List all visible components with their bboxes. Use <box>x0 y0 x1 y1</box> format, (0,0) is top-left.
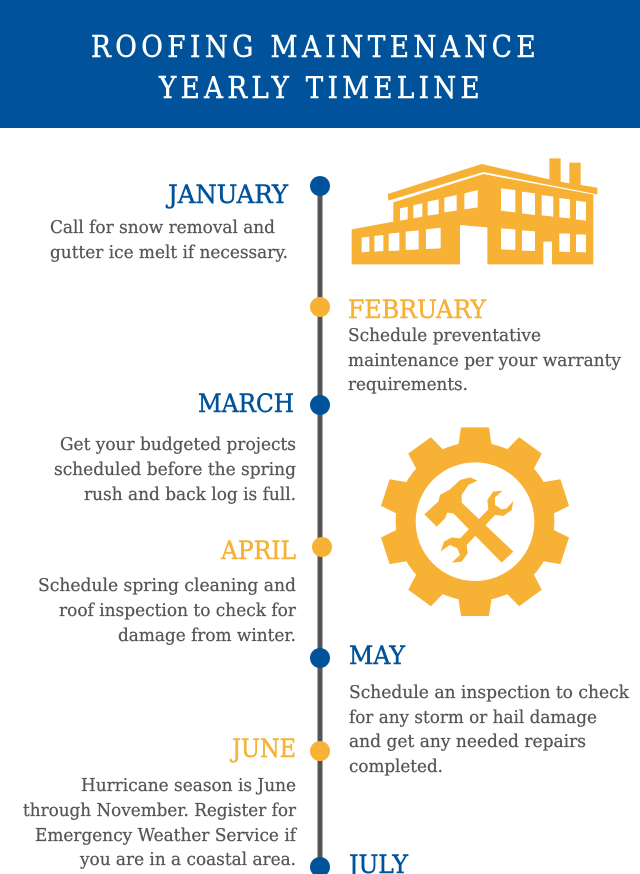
entry: May: MAY <box>349 641 405 670</box>
icon: building <box>352 158 597 264</box>
entry: April: roof inspection to check for <box>59 600 296 621</box>
entry: April: damage from winter. <box>118 625 296 646</box>
entry: March <box>54 389 296 505</box>
entry: May: completed. <box>349 756 443 777</box>
icon: gear with hammer and wrench <box>380 427 570 616</box>
entry: February <box>348 295 622 395</box>
entry: June: through November. Register for <box>23 800 296 821</box>
timeline line <box>318 186 322 874</box>
entry: June: Hurricane season is June <box>81 775 296 796</box>
entry: January: Call for snow removal and <box>50 217 275 238</box>
entry: April <box>38 536 296 646</box>
header banner <box>0 0 640 128</box>
entry: May: and get any needed repairs <box>349 731 586 752</box>
entry: March: MARCH <box>198 389 294 418</box>
entry: June <box>23 734 297 870</box>
entry: January <box>50 180 288 263</box>
entry: January: gutter ice melt if necessary. <box>50 242 288 263</box>
title: ROOFING MAINTENANCE <box>91 30 540 65</box>
entry: February: requirements. <box>348 374 468 395</box>
entry: May <box>349 641 630 777</box>
entry: February: FEBRUARY <box>348 295 486 324</box>
title: YEARLY TIMELINE <box>158 71 484 106</box>
entry: March: Get your budgeted projects <box>60 434 296 455</box>
entry: June: Emergency Weather Service if <box>35 825 297 846</box>
entry: April: APRIL <box>220 536 296 565</box>
entry: March: rush and back log is full. <box>84 484 296 505</box>
entry: May: for any storm or hail damage <box>349 707 597 728</box>
entry: February: maintenance per your warranty <box>348 350 622 371</box>
entry: April: Schedule spring cleaning and <box>38 575 296 596</box>
entry: June: JUNE <box>229 734 296 763</box>
entry: May: Schedule an inspection to check <box>349 682 630 703</box>
timeline dots <box>310 176 332 874</box>
title <box>91 30 540 106</box>
entry: February: Schedule preventative <box>348 325 541 346</box>
entry: January: JANUARY <box>165 180 288 209</box>
entry: June: you are in a coastal area. <box>79 849 296 870</box>
entry: March: scheduled before the spring <box>54 459 296 480</box>
